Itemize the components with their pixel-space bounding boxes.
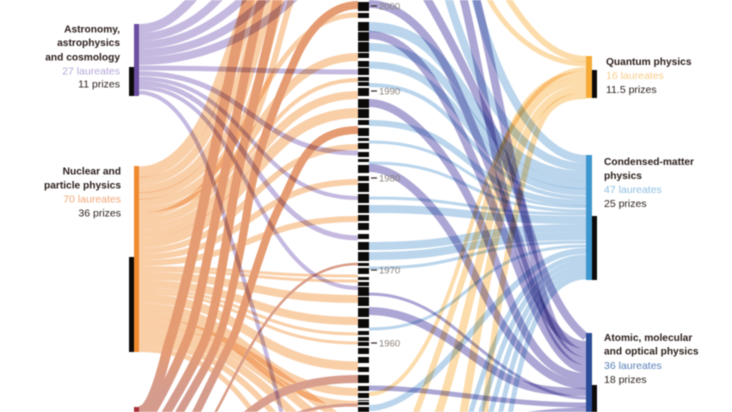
label: atomic, molecular and optical physics: 36 laureates xyxy=(604,360,662,372)
label: atomic, molecular and optical physics: and optical physics xyxy=(604,346,699,358)
node bar: lower-left field xyxy=(134,407,139,412)
flows: years to atomic, molecular and optical physics xyxy=(369,0,586,412)
label: astronomy: Astronomy, xyxy=(64,24,120,36)
label: astronomy: and cosmology xyxy=(45,52,120,64)
label: astronomy: 11 prizes xyxy=(78,78,120,90)
label: condensed-matter physics xyxy=(604,157,694,210)
label: condensed-matter physics: 25 prizes xyxy=(604,198,647,210)
node bar: nuclear and particle physics xyxy=(129,166,139,352)
flows: years to quantum physics xyxy=(369,0,586,412)
label: astronomy: astrophysics xyxy=(57,38,120,49)
label: nuclear and particle physics: 70 laureates xyxy=(63,194,121,206)
year labels xyxy=(371,2,400,350)
label: nuclear and particle physics: Nuclear and xyxy=(63,166,121,178)
flows: astronomy to years xyxy=(139,0,358,412)
label: astronomy xyxy=(45,24,120,90)
year labels: 1990 xyxy=(379,86,400,98)
year labels: 1970 xyxy=(379,266,400,276)
label: quantum physics: Quantum physics xyxy=(606,57,692,68)
label: atomic, molecular and optical physics: 18 prizes xyxy=(604,374,647,386)
flows: years to condensed-matter physics xyxy=(369,0,586,412)
label: nuclear and particle physics xyxy=(44,166,121,220)
label: quantum physics: 16 laureates xyxy=(606,70,664,82)
label: quantum physics xyxy=(606,57,692,96)
node bar: quantum physics xyxy=(586,56,597,98)
year labels: 1960 xyxy=(379,338,400,350)
label: nuclear and particle physics: 36 prizes xyxy=(78,208,121,220)
node bar: atomic, molecular and optical physics xyxy=(586,333,597,412)
label: atomic, molecular and optical physics: Atomic, molecular xyxy=(604,333,692,344)
label: astronomy: 27 laureates xyxy=(62,66,120,78)
node bar: astronomy xyxy=(129,24,139,96)
label: quantum physics: 11.5 prizes xyxy=(606,84,657,96)
node bar: condensed-matter physics xyxy=(586,155,597,280)
label: atomic, molecular and optical physics xyxy=(604,333,699,386)
label: condensed-matter physics: 47 laureates xyxy=(604,184,662,196)
label: condensed-matter physics: Condensed-matter xyxy=(604,157,694,168)
year scale: black ladder xyxy=(358,2,369,412)
year labels: 2000 xyxy=(379,2,400,12)
year labels: 1980 xyxy=(379,174,400,184)
flows: nuclear and particle physics to years xyxy=(139,0,358,412)
label: condensed-matter physics: physics xyxy=(604,171,642,182)
label: nuclear and particle physics: particle physics xyxy=(44,180,121,192)
flows: lower-left field to years xyxy=(139,0,358,412)
